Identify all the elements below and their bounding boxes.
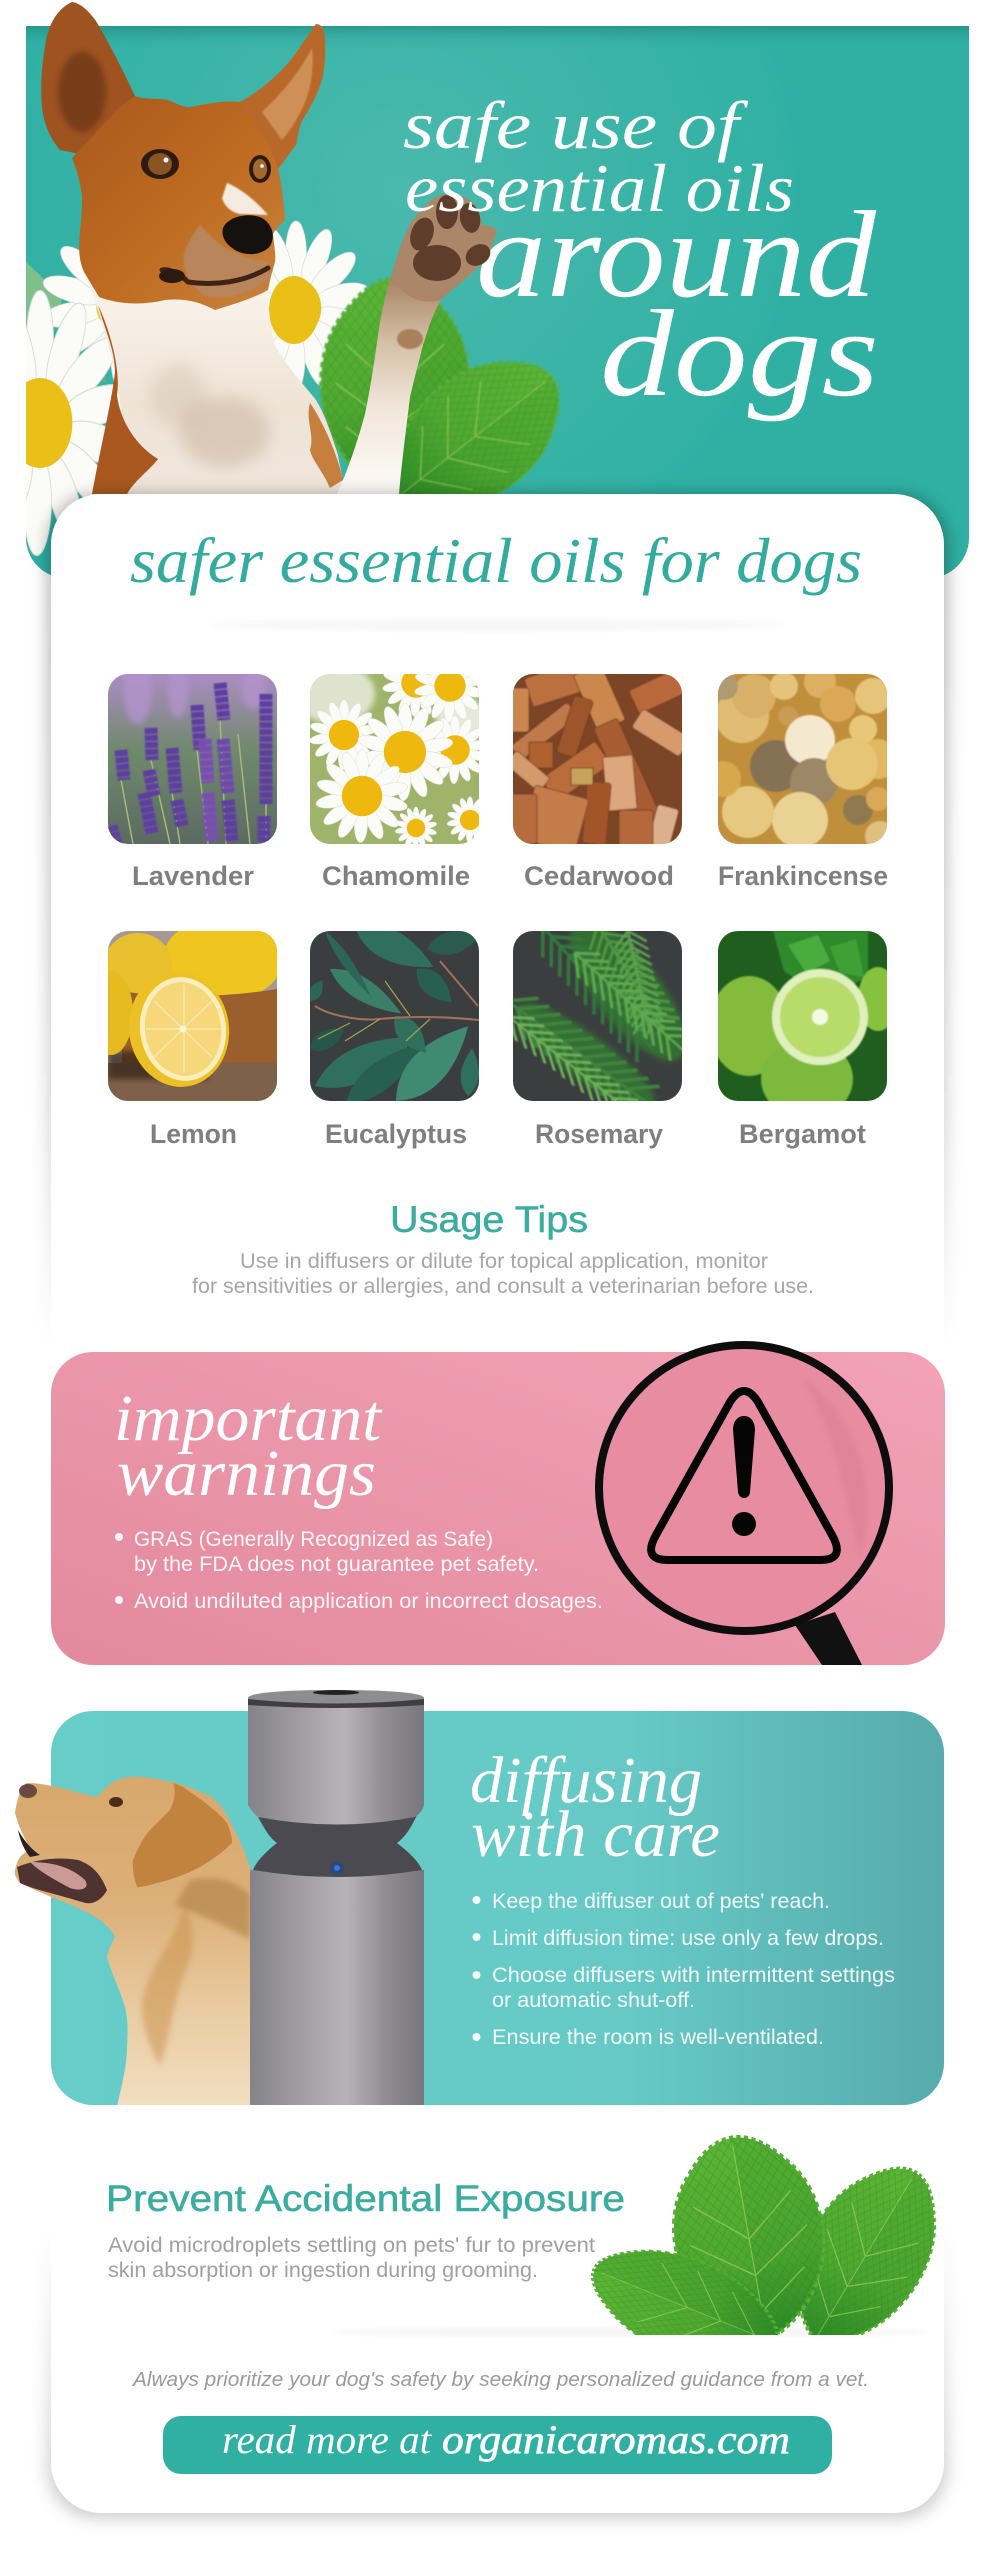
- button text: read more at: [222, 2417, 432, 2462]
- hero title: around dogs: [476, 186, 879, 422]
- diffusing list: Keep the diffuser out of pets' reach.: [492, 1890, 830, 1913]
- diffusing list: [472, 1890, 895, 2049]
- oil labels: Rosemary: [535, 1119, 663, 1149]
- tile: lavender: [108, 664, 277, 844]
- panel: important warnings: [51, 1345, 945, 1665]
- oil labels: Lemon: [150, 1119, 237, 1149]
- oil labels: Cedarwood: [524, 861, 674, 891]
- white content card: [47, 494, 948, 2518]
- warnings list: GRAS (Generally Recognized as Safe): [134, 1528, 493, 1551]
- warnings list: by the FDA does not guarantee pet safety.: [134, 1553, 539, 1576]
- hero title: safe use of essential oils: essential oils: [405, 150, 794, 226]
- hero title: safe use of essential oils: safe use of: [403, 87, 748, 163]
- hero title: around dogs: around: [476, 186, 877, 323]
- diffusing list: Choose diffusers with intermittent settings: [492, 1964, 895, 1987]
- warning triangle icon: [651, 1391, 837, 1560]
- button text: [222, 2417, 790, 2462]
- usage tips text: for sensitivities or allergies, and consult a veterinarian before use.: [192, 1275, 814, 1298]
- hero background: [26, 26, 969, 578]
- hero dog: [41, 2, 497, 494]
- diffusing heading: diffusing: [470, 1744, 702, 1817]
- tile: cedarwood: [513, 674, 682, 844]
- usage tips text: [192, 1250, 814, 1298]
- tile: lemon: [108, 931, 277, 1101]
- magnifying glass: [599, 1345, 889, 1665]
- hero mint leaves: [318, 276, 561, 494]
- oil labels: Frankincense: [718, 861, 888, 891]
- usage tips text: Use in diffusers or dilute for topical application, monitor: [240, 1250, 768, 1273]
- dog head: [72, 96, 285, 310]
- call to action button: [163, 2416, 832, 2474]
- usage tips heading: Usage Tips: [390, 1199, 588, 1240]
- diffuser device: [248, 1690, 424, 2106]
- prevent text: Avoid microdroplets settling on pets' fur to prevent: [108, 2234, 595, 2257]
- diffusing list: Ensure the room is well-ventilated.: [492, 2026, 824, 2049]
- dog body: [84, 272, 343, 494]
- hero chamomile flowers: [0, 220, 371, 556]
- prevent text: skin absorption or ingestion during grooming.: [108, 2259, 538, 2282]
- tile: frankincense: [718, 674, 887, 844]
- oil labels: Eucalyptus: [325, 1119, 467, 1149]
- diffusing heading: with care: [471, 1798, 720, 1871]
- dog paw: [391, 194, 497, 302]
- oil labels: Lavender: [132, 861, 254, 891]
- labrador dog: [15, 1777, 251, 2106]
- tile: rosemary: [513, 931, 682, 1101]
- tile: eucalyptus: [310, 931, 479, 1101]
- prevent accidental exposure: [106, 2178, 625, 2282]
- diffusing heading: [470, 1744, 720, 1871]
- oil labels: [132, 861, 888, 1149]
- warnings heading: important: [114, 1382, 383, 1455]
- oil labels: Bergamot: [739, 1119, 866, 1149]
- tile: chamomile: [310, 674, 479, 844]
- closing note: Always prioritize your dog's safety by seeking personalized guidance from a vet.: [132, 2369, 869, 2391]
- warnings list: Avoid undiluted application or incorrect dosages.: [134, 1590, 603, 1613]
- tile: bergamot: [718, 931, 887, 1101]
- diffusing list: Limit diffusion time: use only a few drops.: [492, 1927, 884, 1950]
- warnings heading: warnings: [117, 1437, 376, 1510]
- hero title: safe use of essential oils: [403, 87, 794, 226]
- prevent heading: Prevent Accidental Exposure: [106, 2178, 625, 2219]
- button text: organicaromas.com: [442, 2417, 790, 2462]
- dog raised leg: [337, 276, 441, 494]
- mint leaves: [590, 2134, 936, 2335]
- diffusing list: or automatic shut-off.: [492, 1989, 695, 2012]
- prevent text: [108, 2234, 595, 2282]
- oils grid: [89, 649, 898, 1124]
- oil labels: Chamomile: [322, 861, 470, 891]
- panel: diffusing with care: [15, 1690, 944, 2106]
- dog ears: [41, 2, 325, 169]
- heading: safer essential oils: safer essential oils for dogs: [130, 525, 862, 596]
- warnings list: [115, 1528, 603, 1613]
- usage tips: [192, 1199, 814, 1298]
- hero title: around dogs: dogs: [600, 285, 879, 422]
- warnings heading: [114, 1382, 383, 1510]
- hero panel: [0, 2, 969, 578]
